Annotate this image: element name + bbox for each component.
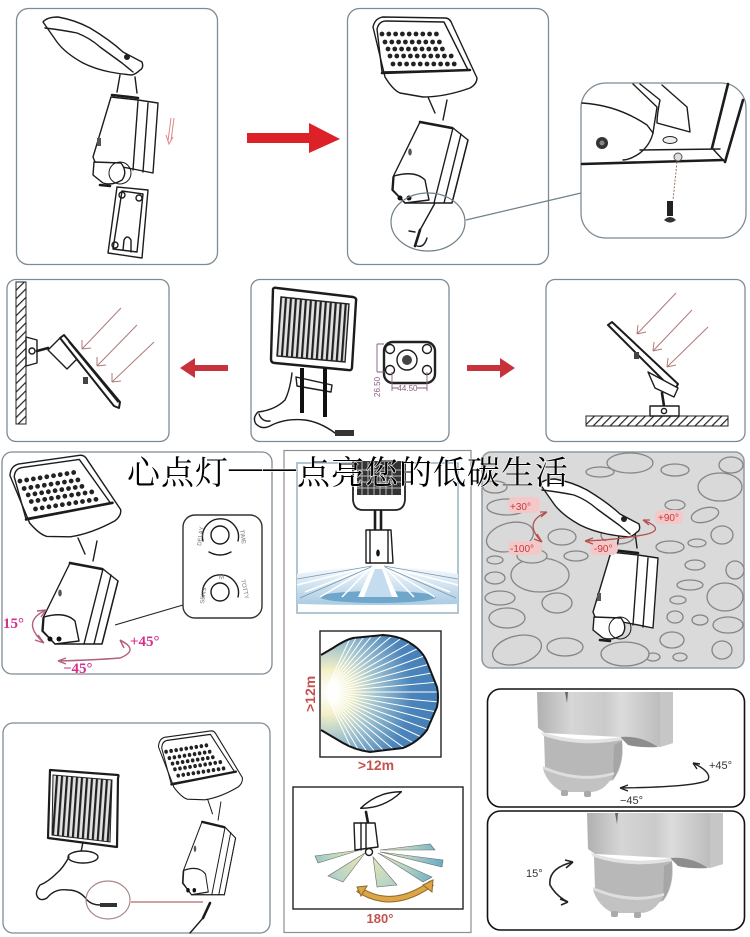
icon: hatched ground (586, 416, 728, 426)
icon: mounting base dimensions (373, 342, 435, 397)
icon: sun rays left (82, 308, 154, 382)
icon: sun rays right (637, 293, 708, 367)
icon: sensor photo (587, 813, 723, 918)
connector line (115, 605, 183, 625)
arrow: red left (180, 358, 228, 378)
icon: sensor photo (537, 692, 673, 797)
icon: LED lamp (157, 726, 245, 895)
icon: lamp on wall (540, 479, 658, 641)
angle marks (3, 610, 160, 677)
panel: lamp with LED head (348, 8, 581, 264)
icon: LED head (373, 17, 477, 97)
arrow: red right (467, 358, 515, 378)
icon: side solar panel on ground (608, 322, 679, 416)
icon: side solar panel on wall (26, 335, 120, 408)
chart: floor fan (297, 566, 458, 605)
panel: adjustment angles (2, 449, 272, 677)
angle marks: -100° (510, 544, 534, 555)
panel: ground mounted solar (546, 280, 745, 442)
icon: mounting plate (108, 187, 148, 258)
label: horizontal distance: >12m (358, 757, 394, 773)
icon: mini lamp (354, 788, 403, 856)
panel: stone wall lamp angles (482, 452, 744, 670)
label: 180 degrees: 180° (367, 911, 393, 926)
panel: solar panel and dimensions (251, 280, 449, 442)
panel: top coverage (306, 630, 442, 770)
panel: wall mounted solar (7, 280, 169, 442)
panel: lamp and mounting plate (16, 8, 218, 264)
angle marks (620, 760, 732, 807)
icon: hatched wall (16, 282, 26, 424)
panel: 180 degree detection (293, 787, 463, 926)
panel: control dials: TIME (238, 529, 246, 544)
connector line (466, 193, 581, 220)
title: 心点灯 (127, 456, 228, 492)
angle marks: +30° (510, 502, 531, 513)
angle marks: +90° (658, 513, 679, 524)
chart: detection fans (315, 844, 443, 887)
panel: control dials: M (219, 575, 224, 581)
title: 点亮您的低碳生活 (297, 455, 568, 492)
panel: control dials: TOTTY (239, 579, 249, 600)
angle marks: 15° (3, 616, 24, 632)
panel: control dials: SENS (200, 587, 208, 604)
panel: screw detail (581, 83, 746, 238)
panel: sensor coverage column (284, 450, 471, 932)
angle marks: 15° (526, 868, 543, 880)
chart: coverage blob (320, 634, 439, 753)
icon: LED lamp (8, 449, 124, 644)
stones (483, 453, 744, 670)
panel: photo tilt (488, 811, 744, 930)
panel: front view (297, 462, 458, 613)
angle marks: −45° (620, 795, 643, 807)
icon: small red down arrow (166, 118, 174, 144)
icon: lamp with flat head (43, 17, 158, 186)
icon: mounting base dimensions: 44.50 (397, 384, 418, 393)
panel: cable connection (3, 723, 270, 933)
title: —— (228, 450, 297, 486)
angle marks: -90° (594, 544, 612, 555)
icon: cable zoom circle (391, 193, 465, 251)
icon: mounting base dimensions: 26.50 (373, 376, 382, 397)
icon: orange 180 arrow (357, 880, 433, 899)
icon: front lamp (353, 462, 405, 563)
icon: connection callout (86, 881, 210, 933)
panel: photo horizontal rotation (488, 689, 744, 807)
icon: lamp body (392, 97, 468, 203)
angle marks: +45° (709, 760, 732, 772)
arrow: large red right (247, 123, 340, 153)
angle marks: +45° (130, 634, 160, 650)
icon: solar panel (36, 770, 118, 907)
icon: mount, connectors and cable (254, 368, 354, 436)
icon: solar panel (271, 288, 356, 370)
angle marks: −45° (63, 661, 93, 677)
panel: control dials: DELAY (197, 526, 206, 546)
label: vertical distance: >12m (302, 676, 318, 712)
angle marks (526, 860, 573, 905)
panel: control dials (183, 515, 262, 618)
angle marks (508, 497, 683, 555)
